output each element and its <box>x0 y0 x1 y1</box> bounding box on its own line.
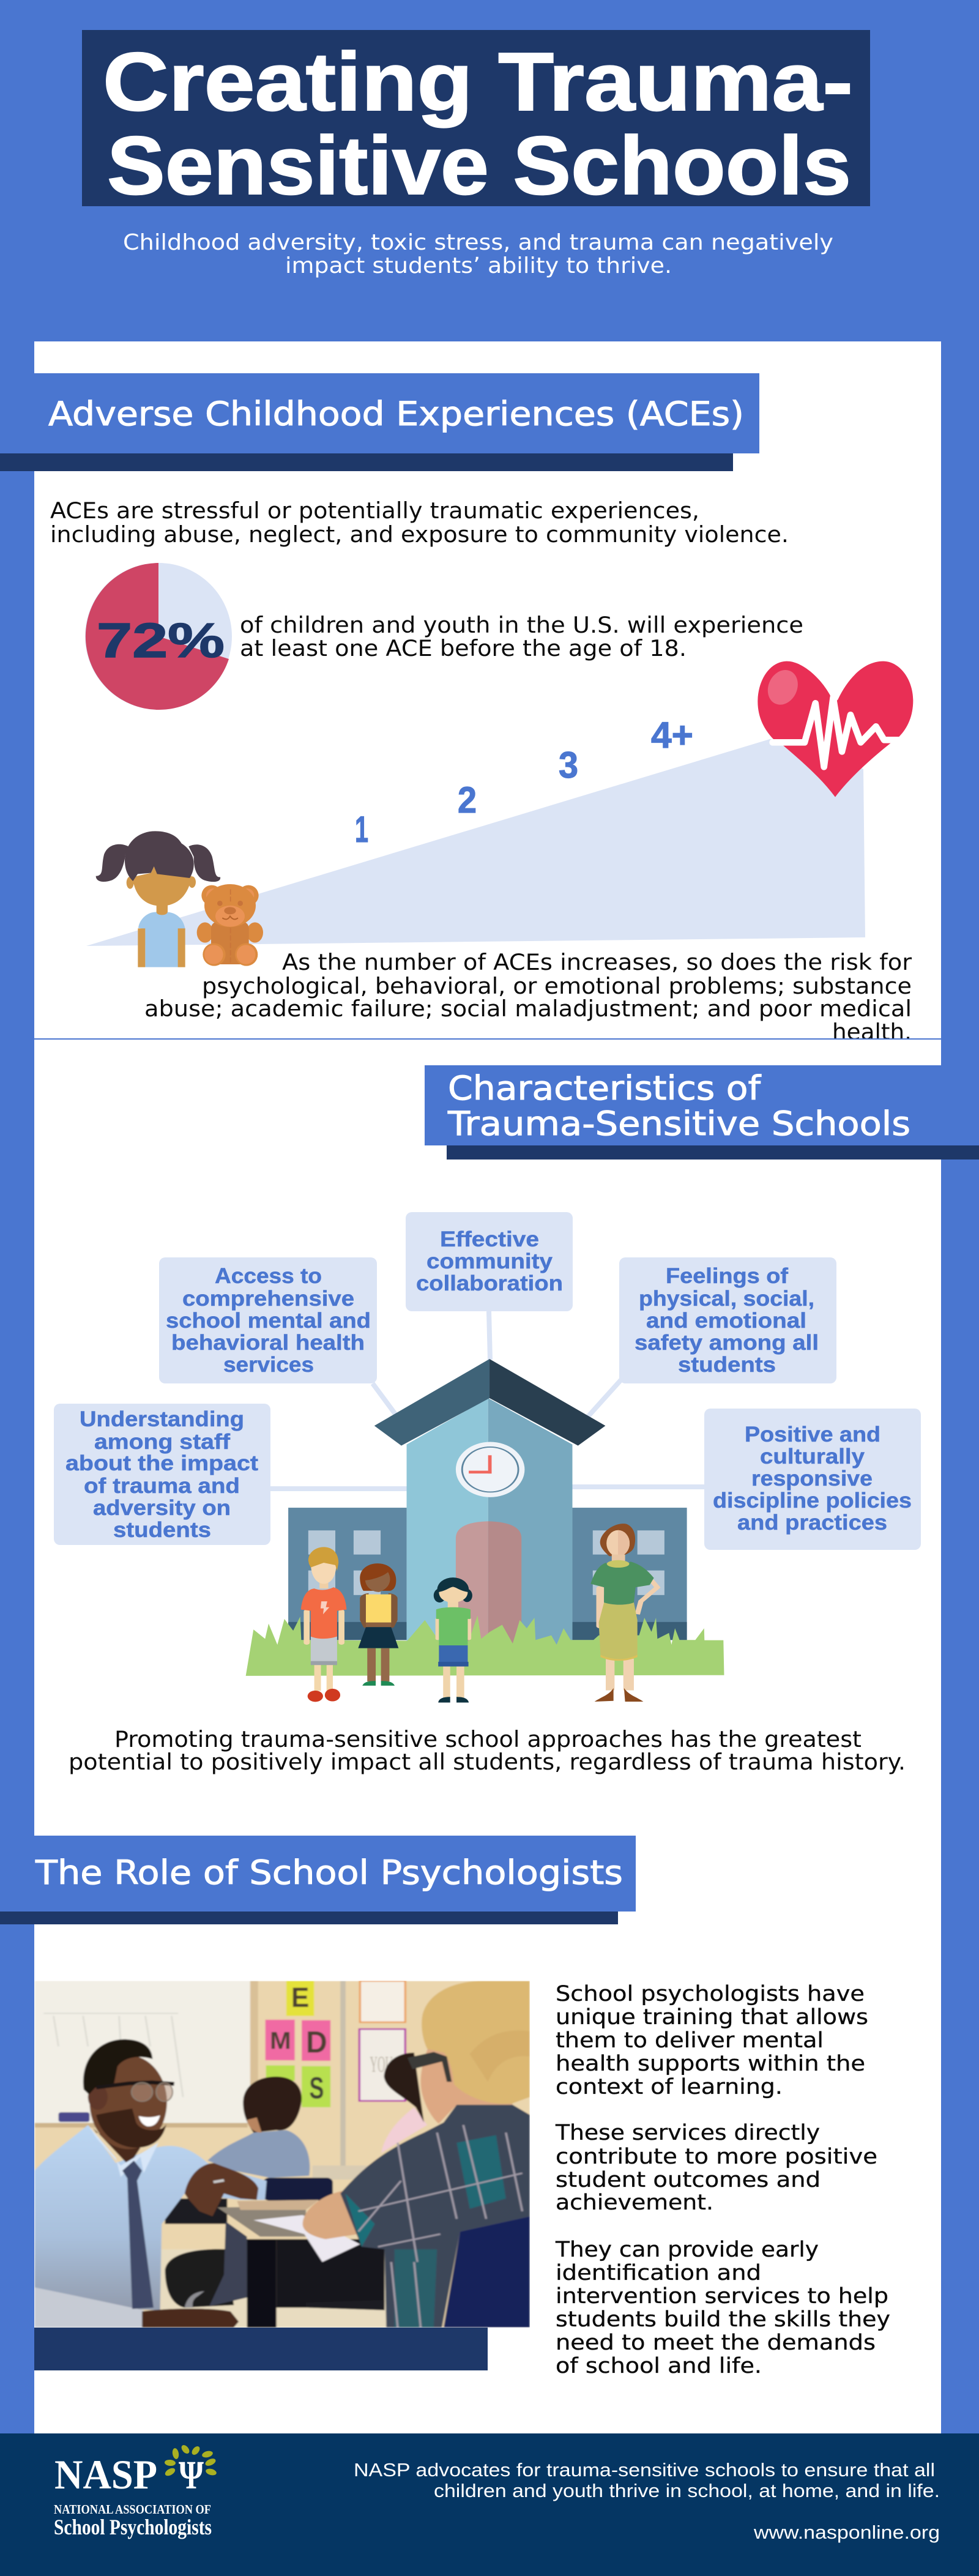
callout: staff understanding: among staff <box>94 1430 230 1454</box>
callout: community collaboration: collaboration <box>416 1271 563 1295</box>
icon: heart with pulse <box>758 661 913 797</box>
callout: mental health services: services <box>223 1353 314 1377</box>
text: school psychologists role: health supports within the <box>556 2052 865 2076</box>
wedge labels: 3 <box>559 745 578 786</box>
callout: responsive discipline: Positive and <box>745 1423 880 1446</box>
text: 72 percent statement <box>240 612 803 661</box>
text: risk statement: health. <box>832 1019 912 1045</box>
classroom posters: YOU <box>370 2052 393 2077</box>
wedge labels: 4+ <box>651 715 693 756</box>
heading: ACEs <box>0 373 759 471</box>
logo: NASP: NATIONAL ASSOCIATION OF <box>54 2502 211 2517</box>
title: Sensitive Schools <box>107 119 851 212</box>
text: risk statement: psychological, behavioral, or emotional problems; substance <box>202 973 912 999</box>
callout: responsive discipline: discipline policies <box>713 1489 912 1513</box>
connector lines <box>270 1311 704 1489</box>
subtitle: impact students’ ability to thrive. <box>285 253 672 278</box>
navy bar under photo <box>34 2328 488 2370</box>
icon: girl with pigtails <box>96 831 220 967</box>
text: school psychologists role: intervention services to help <box>556 2284 888 2309</box>
callout: feelings of safety: Feelings of <box>666 1264 788 1288</box>
grass <box>246 1615 724 1676</box>
text: 72 percent statement: of children and youth in the U.S. will experience <box>240 612 803 638</box>
classroom posters <box>266 1981 405 2107</box>
heading: characteristics: Characteristics of <box>448 1069 762 1107</box>
text: ACEs definition <box>50 497 789 548</box>
footer text: NASP advocates for trauma-sensitive schools to ensure that all <box>354 2459 935 2481</box>
logo: NASP <box>54 2444 217 2539</box>
logo: NASP: NASP <box>54 2451 157 2498</box>
background students <box>207 2053 427 2178</box>
floor and furniture <box>155 2165 391 2328</box>
callout: mental health services: school mental and <box>166 1309 371 1333</box>
text: school psychologists role: need to meet the demands <box>556 2331 876 2355</box>
text: school psychologists role: achievement. <box>556 2191 713 2215</box>
callout: staff understanding: of trauma and <box>84 1474 240 1498</box>
footer text: children and youth thrive in school, at home, and in life. <box>434 2480 940 2501</box>
title: Creating Trauma- <box>103 35 853 128</box>
text: school psychologists role <box>555 1982 890 2378</box>
text: school psychologists role: context of learning. <box>556 2075 783 2099</box>
text: promoting approaches: Promoting trauma-sensitive school approaches has the greatest <box>114 1726 862 1752</box>
callout: community collaboration <box>406 1212 573 1311</box>
classroom posters: D <box>306 2026 327 2060</box>
teacher <box>590 1524 657 1702</box>
callout: feelings of safety: students <box>678 1353 776 1377</box>
callout: mental health services: comprehensive <box>182 1287 354 1311</box>
door <box>456 1521 521 1646</box>
panel: white content <box>34 341 941 2434</box>
callout: mental health services <box>159 1257 377 1383</box>
classroom posters: M <box>270 2027 291 2054</box>
callout: staff understanding <box>54 1404 270 1545</box>
logo: NASP: Ψ <box>179 2453 204 2498</box>
callout: responsive discipline: and practices <box>737 1511 887 1535</box>
callout: feelings of safety: and emotional <box>646 1309 806 1333</box>
wedge labels: 2 <box>458 780 477 821</box>
text: ACEs definition: including abuse, neglect, and exposure to community violence. <box>50 521 789 548</box>
icon: teddy bear <box>197 884 263 966</box>
classroom posters: E <box>291 1982 309 2014</box>
text: school psychologists role: unique training that allows <box>556 2005 868 2030</box>
text: school psychologists role: student outcomes and <box>556 2168 821 2192</box>
heading: ACEs: Adverse Childhood Experiences (ACEs) <box>48 395 744 433</box>
heading: role of school psychologists: The Role of School Psychologists <box>35 1853 623 1892</box>
callout: responsive discipline <box>704 1409 921 1550</box>
heading: role of school psychologists <box>0 1836 636 1924</box>
callout: community collaboration: Effective <box>440 1227 539 1251</box>
student: girl with yellow top <box>358 1563 398 1686</box>
text: risk statement: abuse; academic failure; social maladjustment; and poor medical <box>144 996 912 1022</box>
subtitle <box>123 230 833 278</box>
chart: rising risk wedge <box>86 739 865 946</box>
icon: logo leaves <box>164 2444 217 2477</box>
text: school psychologists role: These services directly <box>555 2121 820 2145</box>
school wings <box>288 1508 687 1640</box>
clock <box>456 1442 524 1497</box>
photo: school psychologist with students <box>34 1981 530 2328</box>
heading: characteristics: Trauma-Sensitive Schools <box>447 1104 910 1143</box>
text: school psychologists role: They can provide early <box>555 2238 819 2262</box>
text: school psychologists role: them to deliver mental <box>556 2028 824 2053</box>
callout: staff understanding: students <box>113 1518 211 1542</box>
chart: 72 percent pie: 72% <box>97 613 225 668</box>
text: school psychologists role: students build the skills they <box>556 2307 890 2332</box>
text: school psychologists role: identification and <box>556 2261 761 2285</box>
student: child with green shirt <box>434 1577 472 1702</box>
illustration: school building with students and teacher <box>246 1359 724 1702</box>
footer url: www.nasponline.org <box>753 2522 940 2543</box>
wedge labels: 1 <box>355 809 368 850</box>
text: risk statement <box>144 949 912 1045</box>
text: ACEs definition: ACEs are stressful or potentially traumatic experiences, <box>50 497 699 524</box>
callout: staff understanding: Understanding <box>80 1407 244 1431</box>
callout: community collaboration: community <box>426 1249 553 1273</box>
footer band <box>0 2433 979 2576</box>
logo: NASP: School Psychologists <box>54 2515 212 2539</box>
text: risk statement: As the number of ACEs increases, so does the risk for <box>282 949 912 975</box>
callout: staff understanding: about the impact <box>65 1451 258 1475</box>
callout: feelings of safety: physical, social, <box>639 1287 814 1311</box>
school tower <box>374 1359 605 1646</box>
callout: feelings of safety <box>619 1257 836 1383</box>
callout: feelings of safety: safety among all <box>635 1331 819 1355</box>
footer text <box>354 2459 940 2501</box>
student: boy in orange shirt <box>301 1547 346 1702</box>
callout: staff understanding: adversity on <box>93 1496 231 1520</box>
wedge labels <box>355 715 693 850</box>
text: promoting approaches <box>69 1726 906 1775</box>
title <box>82 30 870 212</box>
heading: characteristics <box>425 1065 979 1160</box>
text: school psychologists role: School psychologists have <box>556 1982 865 2006</box>
chart: 72 percent pie <box>85 563 232 710</box>
classroom posters: S <box>309 2071 324 2105</box>
text: school psychologists role: contribute to more positive <box>556 2145 877 2169</box>
subtitle: Childhood adversity, toxic stress, and trauma can negatively <box>123 230 833 255</box>
callout: mental health services: behavioral health <box>171 1331 365 1355</box>
student with plaid shirt <box>303 1981 530 2328</box>
text: school psychologists role: of school and life. <box>556 2354 762 2378</box>
callout: mental health services: Access to <box>215 1264 322 1288</box>
callout: responsive discipline: responsive <box>751 1467 873 1491</box>
text: promoting approaches: potential to positively impact all students, regardless of trauma history. <box>69 1749 906 1775</box>
callout: responsive discipline: culturally <box>760 1445 865 1469</box>
text: 72 percent statement: at least one ACE before the age of 18. <box>240 635 687 661</box>
school psychologist <box>34 2039 267 2328</box>
